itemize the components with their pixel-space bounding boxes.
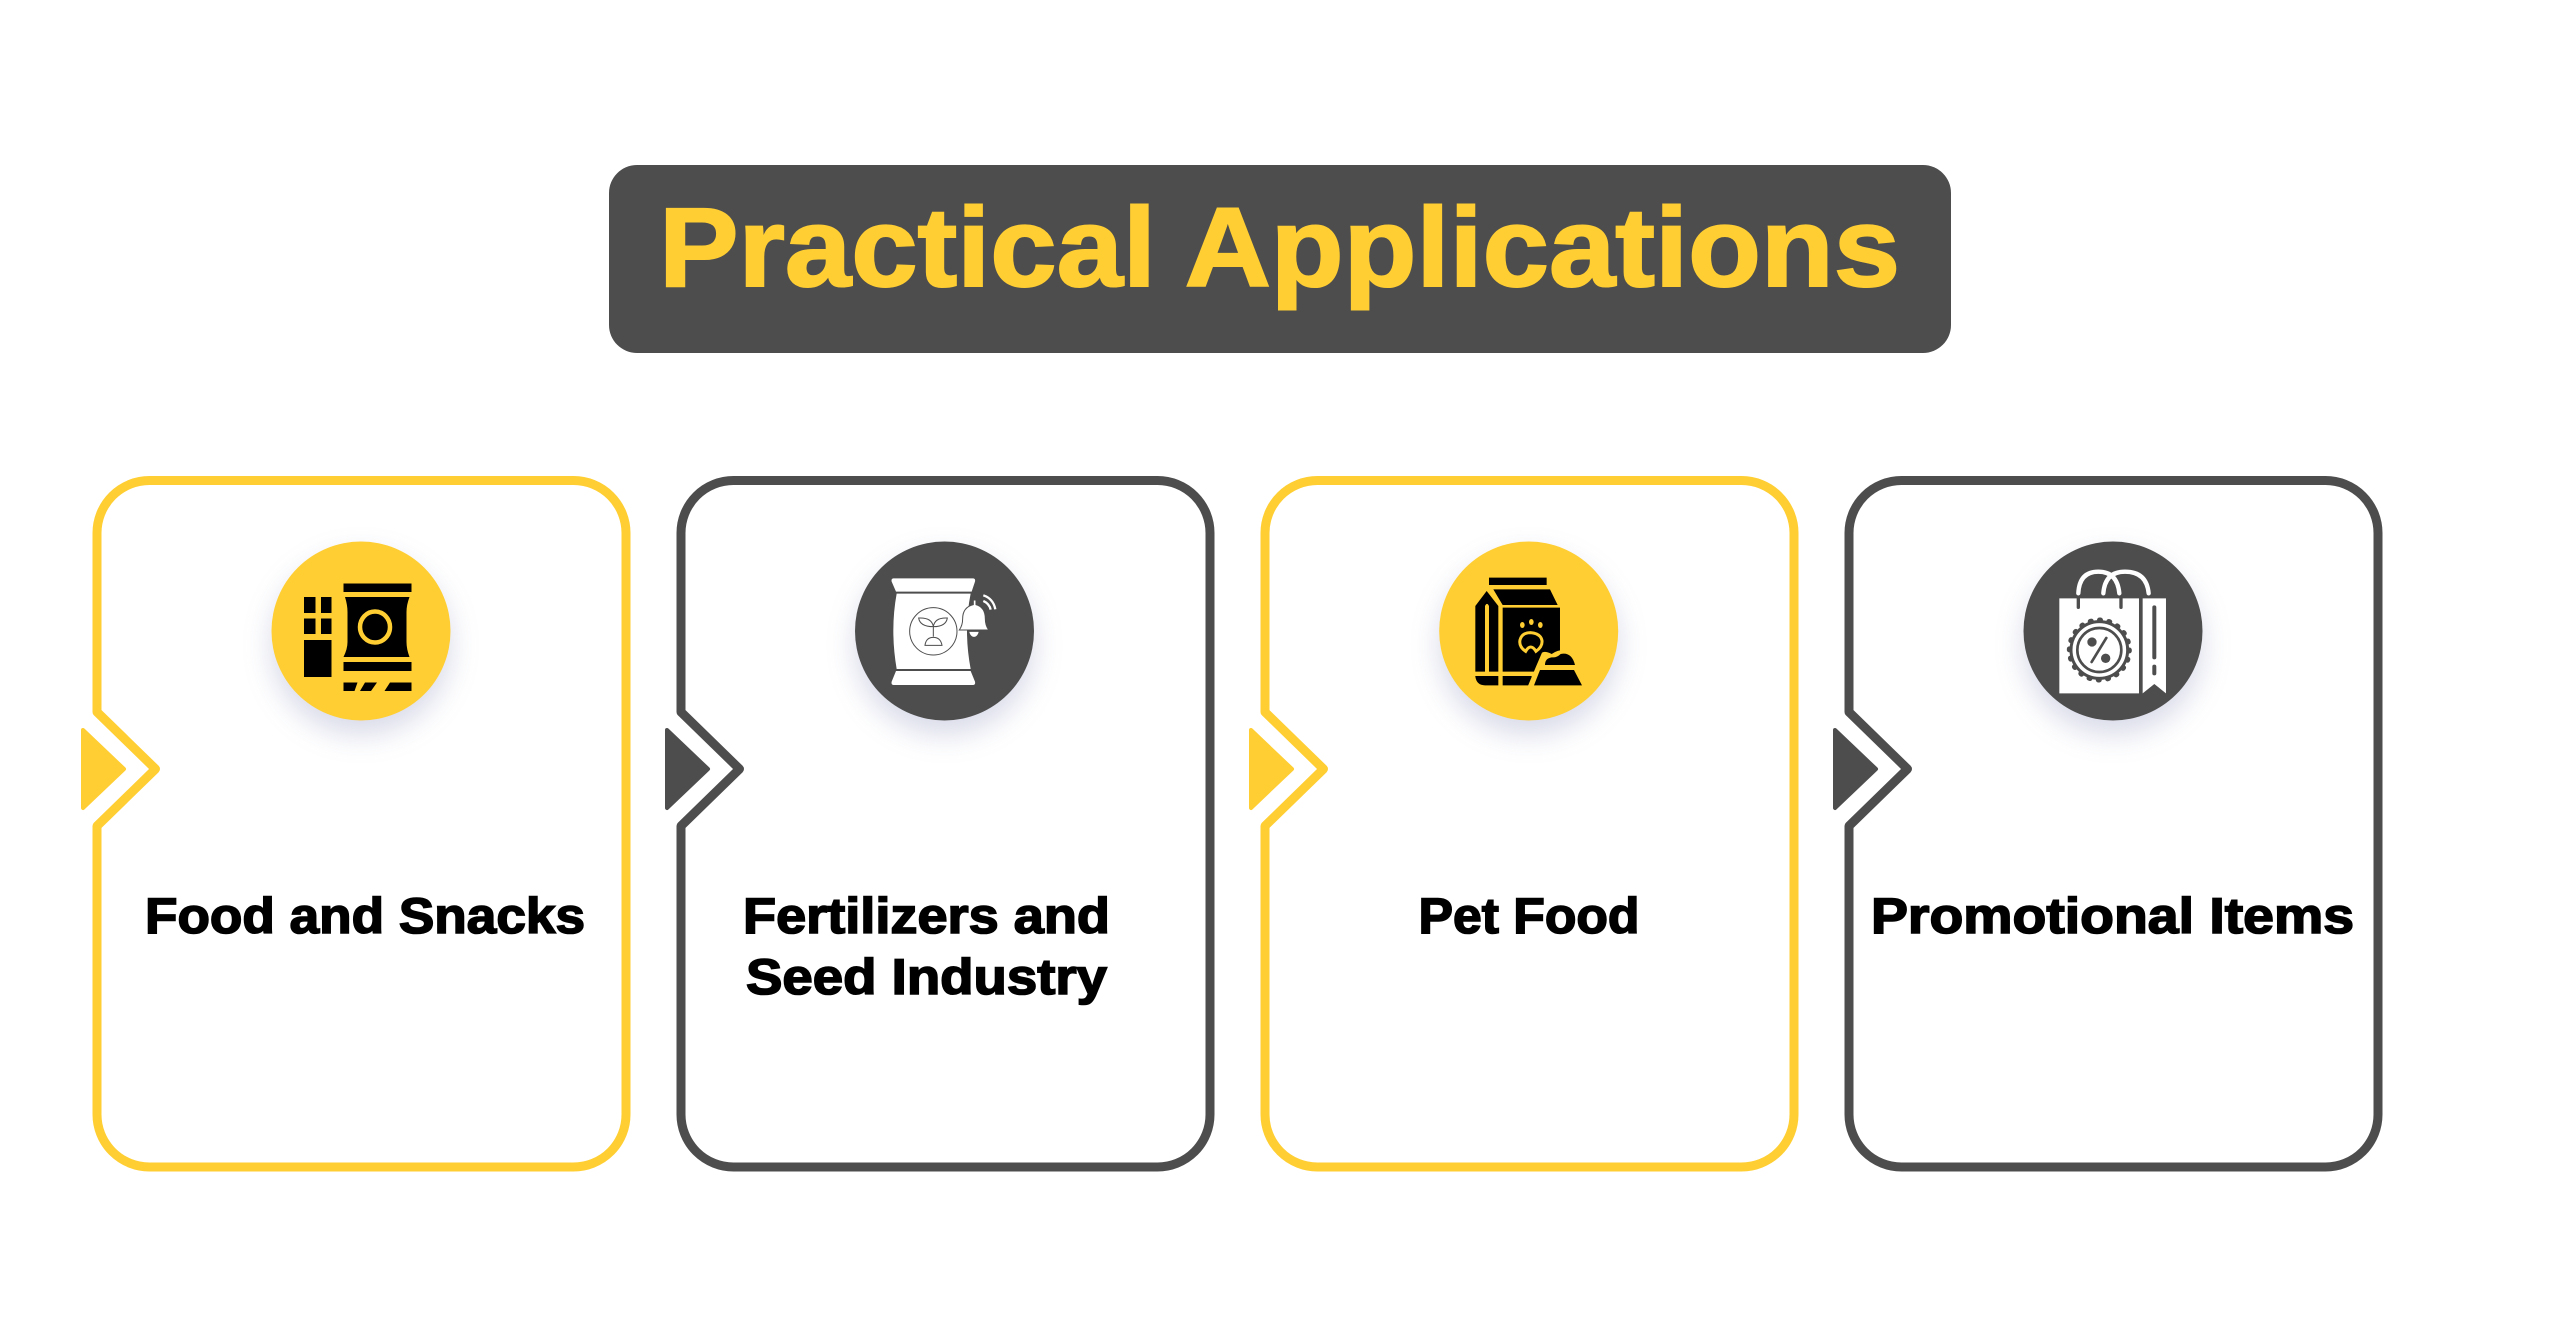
panel: Food and Snacks	[83, 480, 626, 1167]
card outline	[97, 480, 626, 1167]
label: Pet Food	[1418, 888, 1640, 944]
panel: Pet Food	[1251, 480, 1794, 1167]
icon: snack bag and chocolate bar	[272, 542, 450, 720]
title banner: Practical Applications	[659, 185, 1900, 310]
arrow marker	[1251, 730, 1292, 808]
card outline	[1849, 480, 2378, 1167]
card outline	[681, 480, 1210, 1167]
label: Fertilizers and	[743, 888, 1110, 944]
card outline	[1265, 480, 1794, 1167]
icon: fertilizer sack with bell	[855, 542, 1034, 720]
panel: Promotional Items	[1835, 480, 2378, 1167]
title banner	[609, 165, 1951, 353]
panel: Fertilizers and Seed Industry	[667, 480, 1210, 1167]
label: Seed Industry	[746, 949, 1107, 1005]
label: Promotional Items	[1871, 888, 2354, 944]
arrow marker	[667, 730, 708, 808]
icon: shopping bag with discount badge	[2024, 542, 2202, 720]
arrow marker	[83, 730, 124, 808]
icon: pet food box and bowl	[1439, 542, 1618, 720]
label: Food and Snacks	[145, 888, 585, 944]
label	[743, 888, 1110, 1005]
arrow marker	[1835, 730, 1876, 808]
